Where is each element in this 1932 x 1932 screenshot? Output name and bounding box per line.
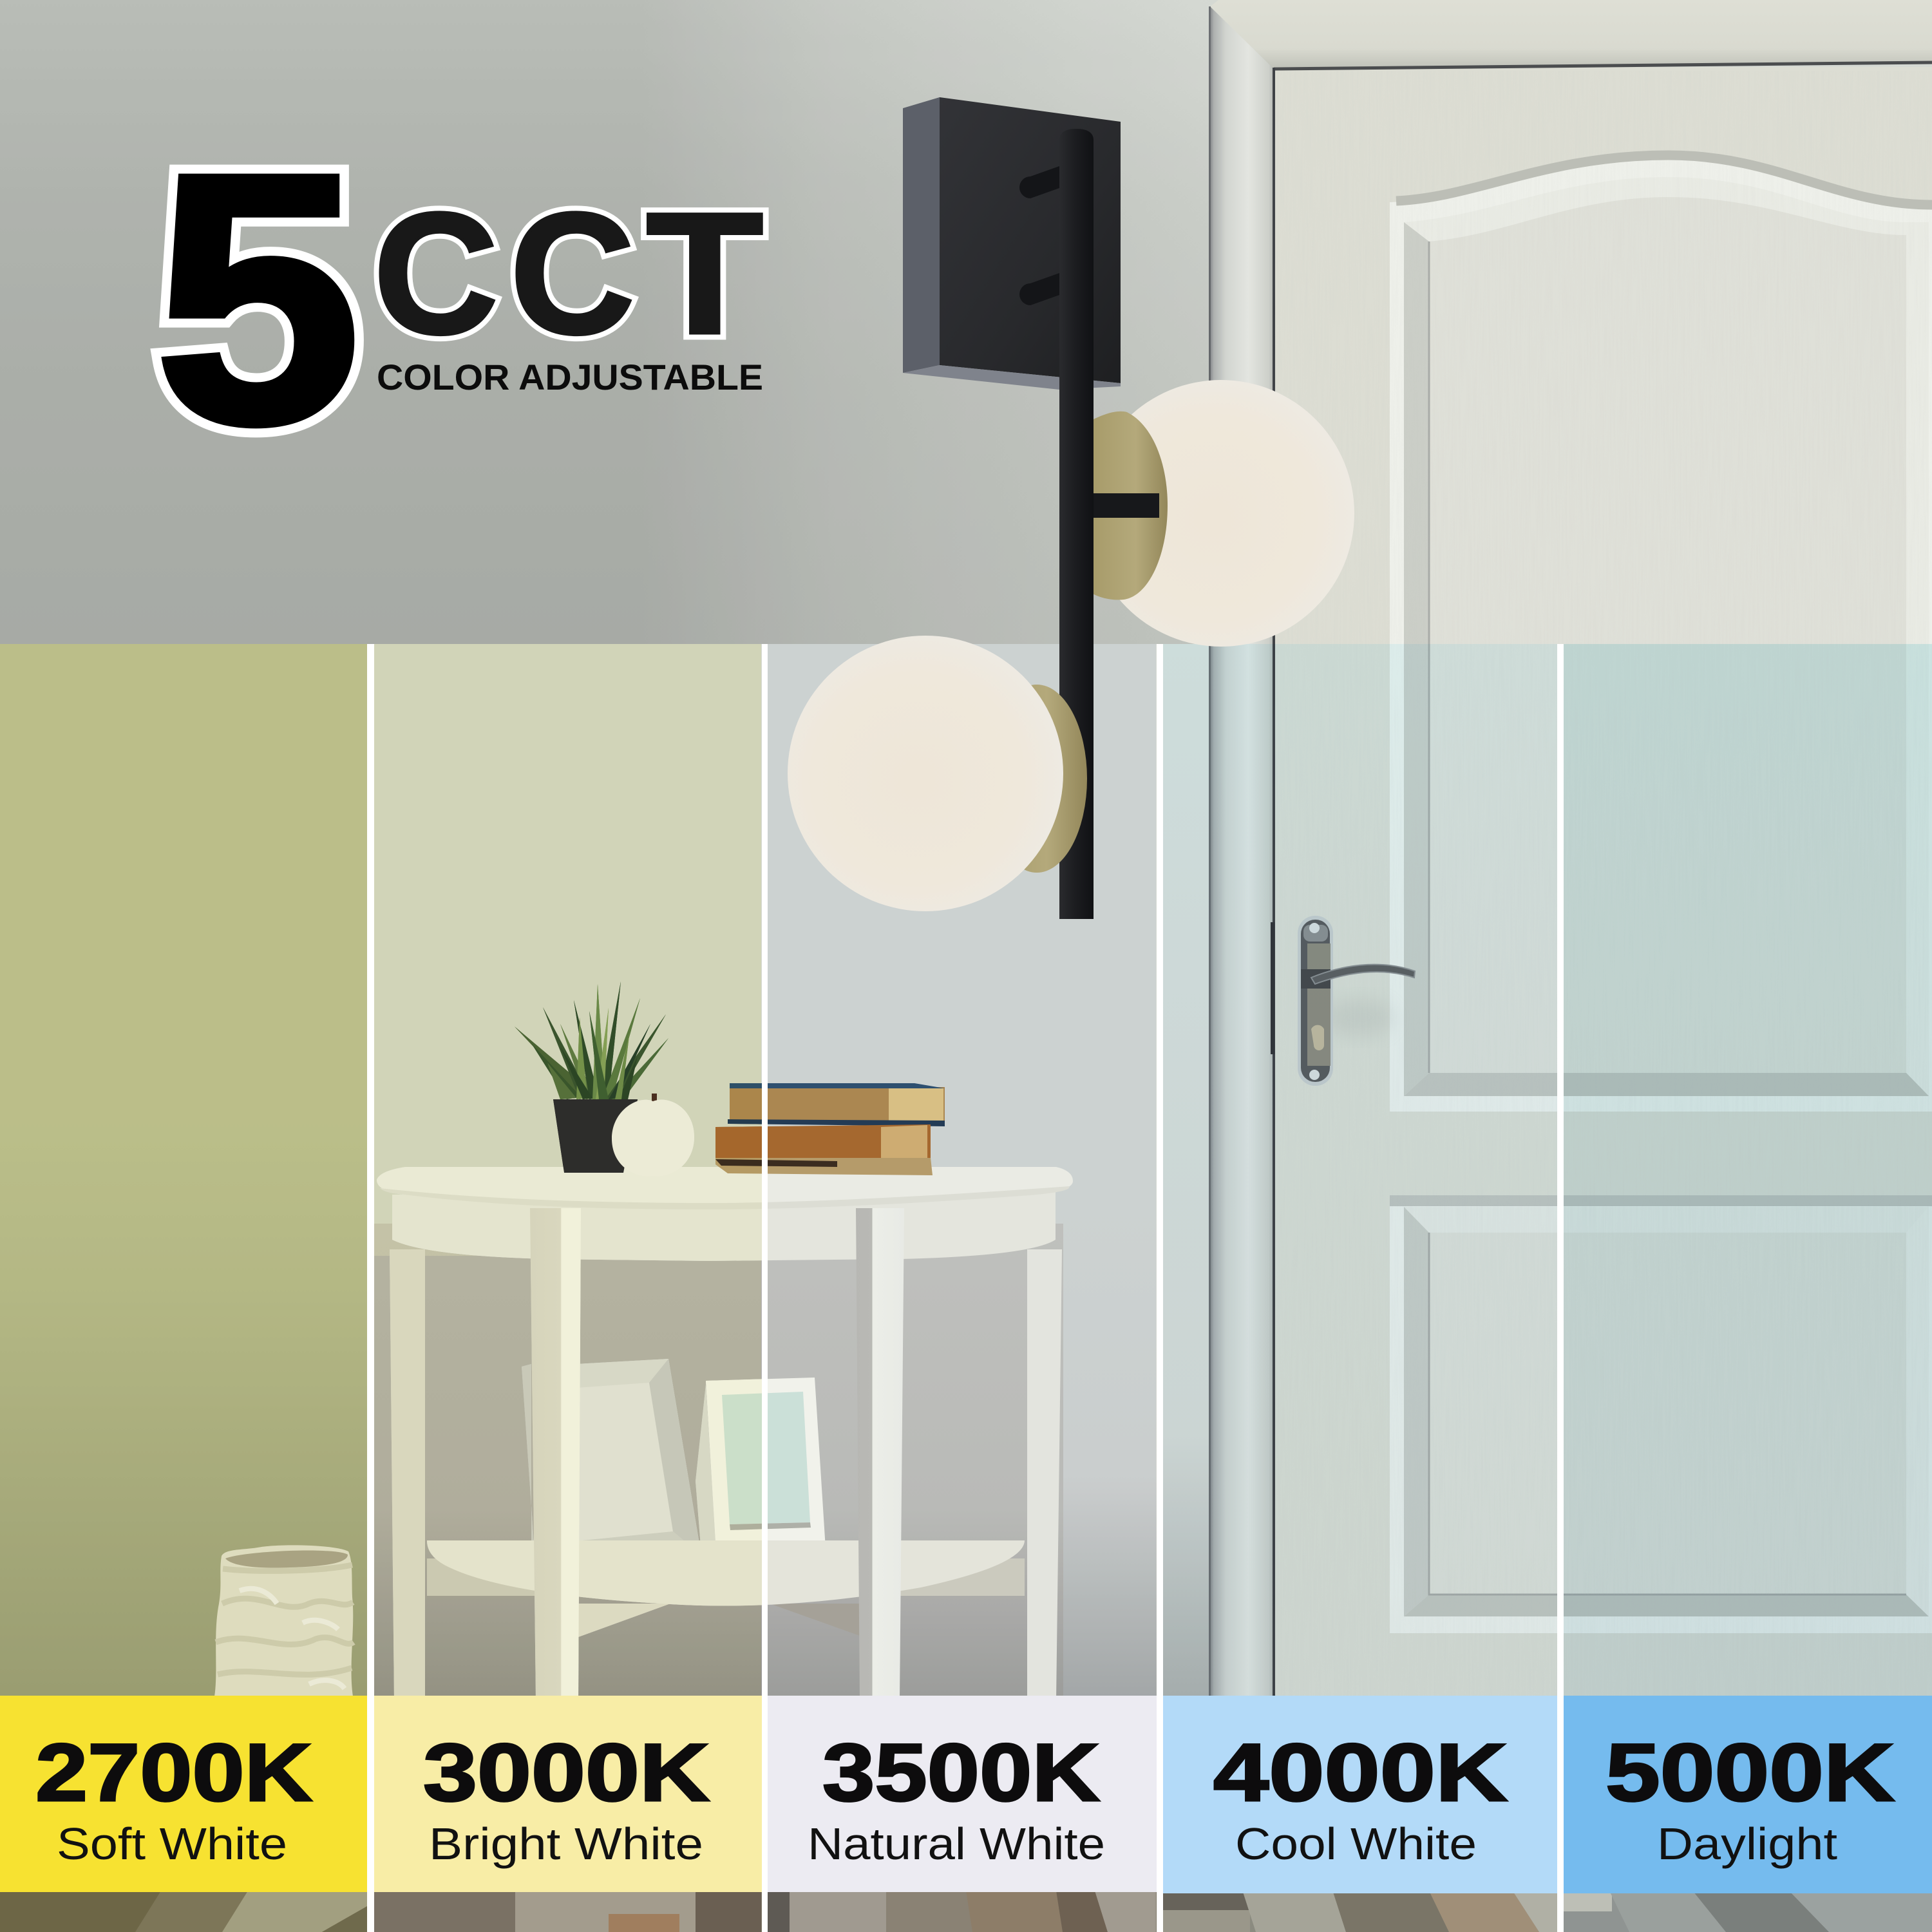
picture frame back (522, 1359, 701, 1567)
door casing (1210, 6, 1274, 1893)
CCT: letter T: T (646, 177, 763, 370)
label band: 3500K Natural White: 3500K (822, 1727, 1100, 1818)
wall sconce product (788, 97, 1354, 919)
wall beside door (1163, 644, 1211, 1700)
subtitle: COLOR ADJUSTABLE (377, 357, 763, 397)
console table with ornaments (377, 981, 1073, 1700)
vertical pole (1059, 129, 1094, 919)
column tint: 3500K (768, 644, 1156, 1700)
right glass globe (1088, 380, 1354, 647)
table underside wall shadow (374, 1224, 1063, 1700)
column tint: 3000K (374, 644, 761, 1700)
label band: 3500K Natural White (768, 1696, 1157, 1892)
table front legs (530, 1208, 904, 1700)
picture frame front (696, 1378, 826, 1563)
backplate underside (903, 365, 1121, 390)
label band: 4000K Cool White (1163, 1696, 1557, 1893)
column floor-shade: 2700K (0, 644, 367, 1700)
shelf brace (578, 1604, 860, 1637)
door upper panel (1390, 155, 1932, 1112)
right arm (1088, 493, 1159, 518)
label band: 5000K Daylight: 5000K (1605, 1727, 1895, 1818)
label band: 4000K Cool White: 4000K (1213, 1727, 1508, 1818)
backplate front (940, 97, 1121, 383)
column tint: 4000K (1163, 644, 1557, 1700)
door handle (1271, 916, 1415, 1086)
label band: 2700K Soft White: 2700K (35, 1727, 312, 1818)
right brass disc (1088, 412, 1168, 600)
numeral 5: 5 (155, 100, 361, 497)
column tint: 2700K (0, 644, 367, 1700)
heading: 5 CCT color adjustable (155, 100, 763, 497)
table apron (392, 1191, 1056, 1261)
CCT: letter T: T (646, 177, 763, 370)
label band: 5000K Daylight: Daylight (1657, 1819, 1837, 1869)
white dividers between columns (367, 644, 1564, 1932)
column tint: 5000K (1564, 644, 1932, 1700)
label band: 3000K Bright White: Bright White (429, 1819, 703, 1869)
CCT: letters C C: CC (374, 176, 635, 370)
wall right of table (1063, 1191, 1163, 1707)
left glass globe (788, 636, 1063, 911)
backplate side (903, 97, 940, 373)
door lower panel (1390, 1195, 1932, 1633)
label band: 3000K Bright White (374, 1696, 762, 1892)
top wall shade vertical (0, 0, 1211, 644)
under-table shade: 3000K (374, 1256, 762, 1700)
shelf back band (427, 1558, 1025, 1596)
door grain texture (1274, 71, 1932, 1893)
label band: 5000K Daylight (1564, 1696, 1932, 1893)
left brass disc (987, 685, 1087, 873)
label band: 3500K Natural White: Natural White (808, 1819, 1105, 1869)
table top (377, 1167, 1073, 1209)
mounting pegs (1019, 166, 1059, 305)
CCT: letters C C: CC (374, 176, 635, 370)
numeral 5: 5 (155, 100, 361, 497)
door leaf (1209, 6, 1932, 1893)
label band: 4000K Cool White: Cool White (1235, 1819, 1477, 1869)
top wall shade horizontal (0, 0, 1211, 644)
white ceramic apple (612, 1094, 694, 1177)
stacked books (715, 1083, 945, 1175)
wood floor (0, 1891, 1932, 1932)
table rear legs (390, 1249, 1062, 1700)
label band: 2700K Soft White (0, 1696, 367, 1892)
ceramic vase (214, 1545, 354, 1700)
plant pot (553, 1099, 638, 1173)
warm tone of table in 3000K column (377, 981, 762, 1696)
shelf (427, 1540, 1025, 1605)
door header trim (1210, 0, 1932, 69)
label band: 3000K Bright White: 3000K (423, 1727, 710, 1818)
plant (515, 981, 668, 1099)
label band: 2700K Soft White: Soft White (57, 1819, 287, 1869)
